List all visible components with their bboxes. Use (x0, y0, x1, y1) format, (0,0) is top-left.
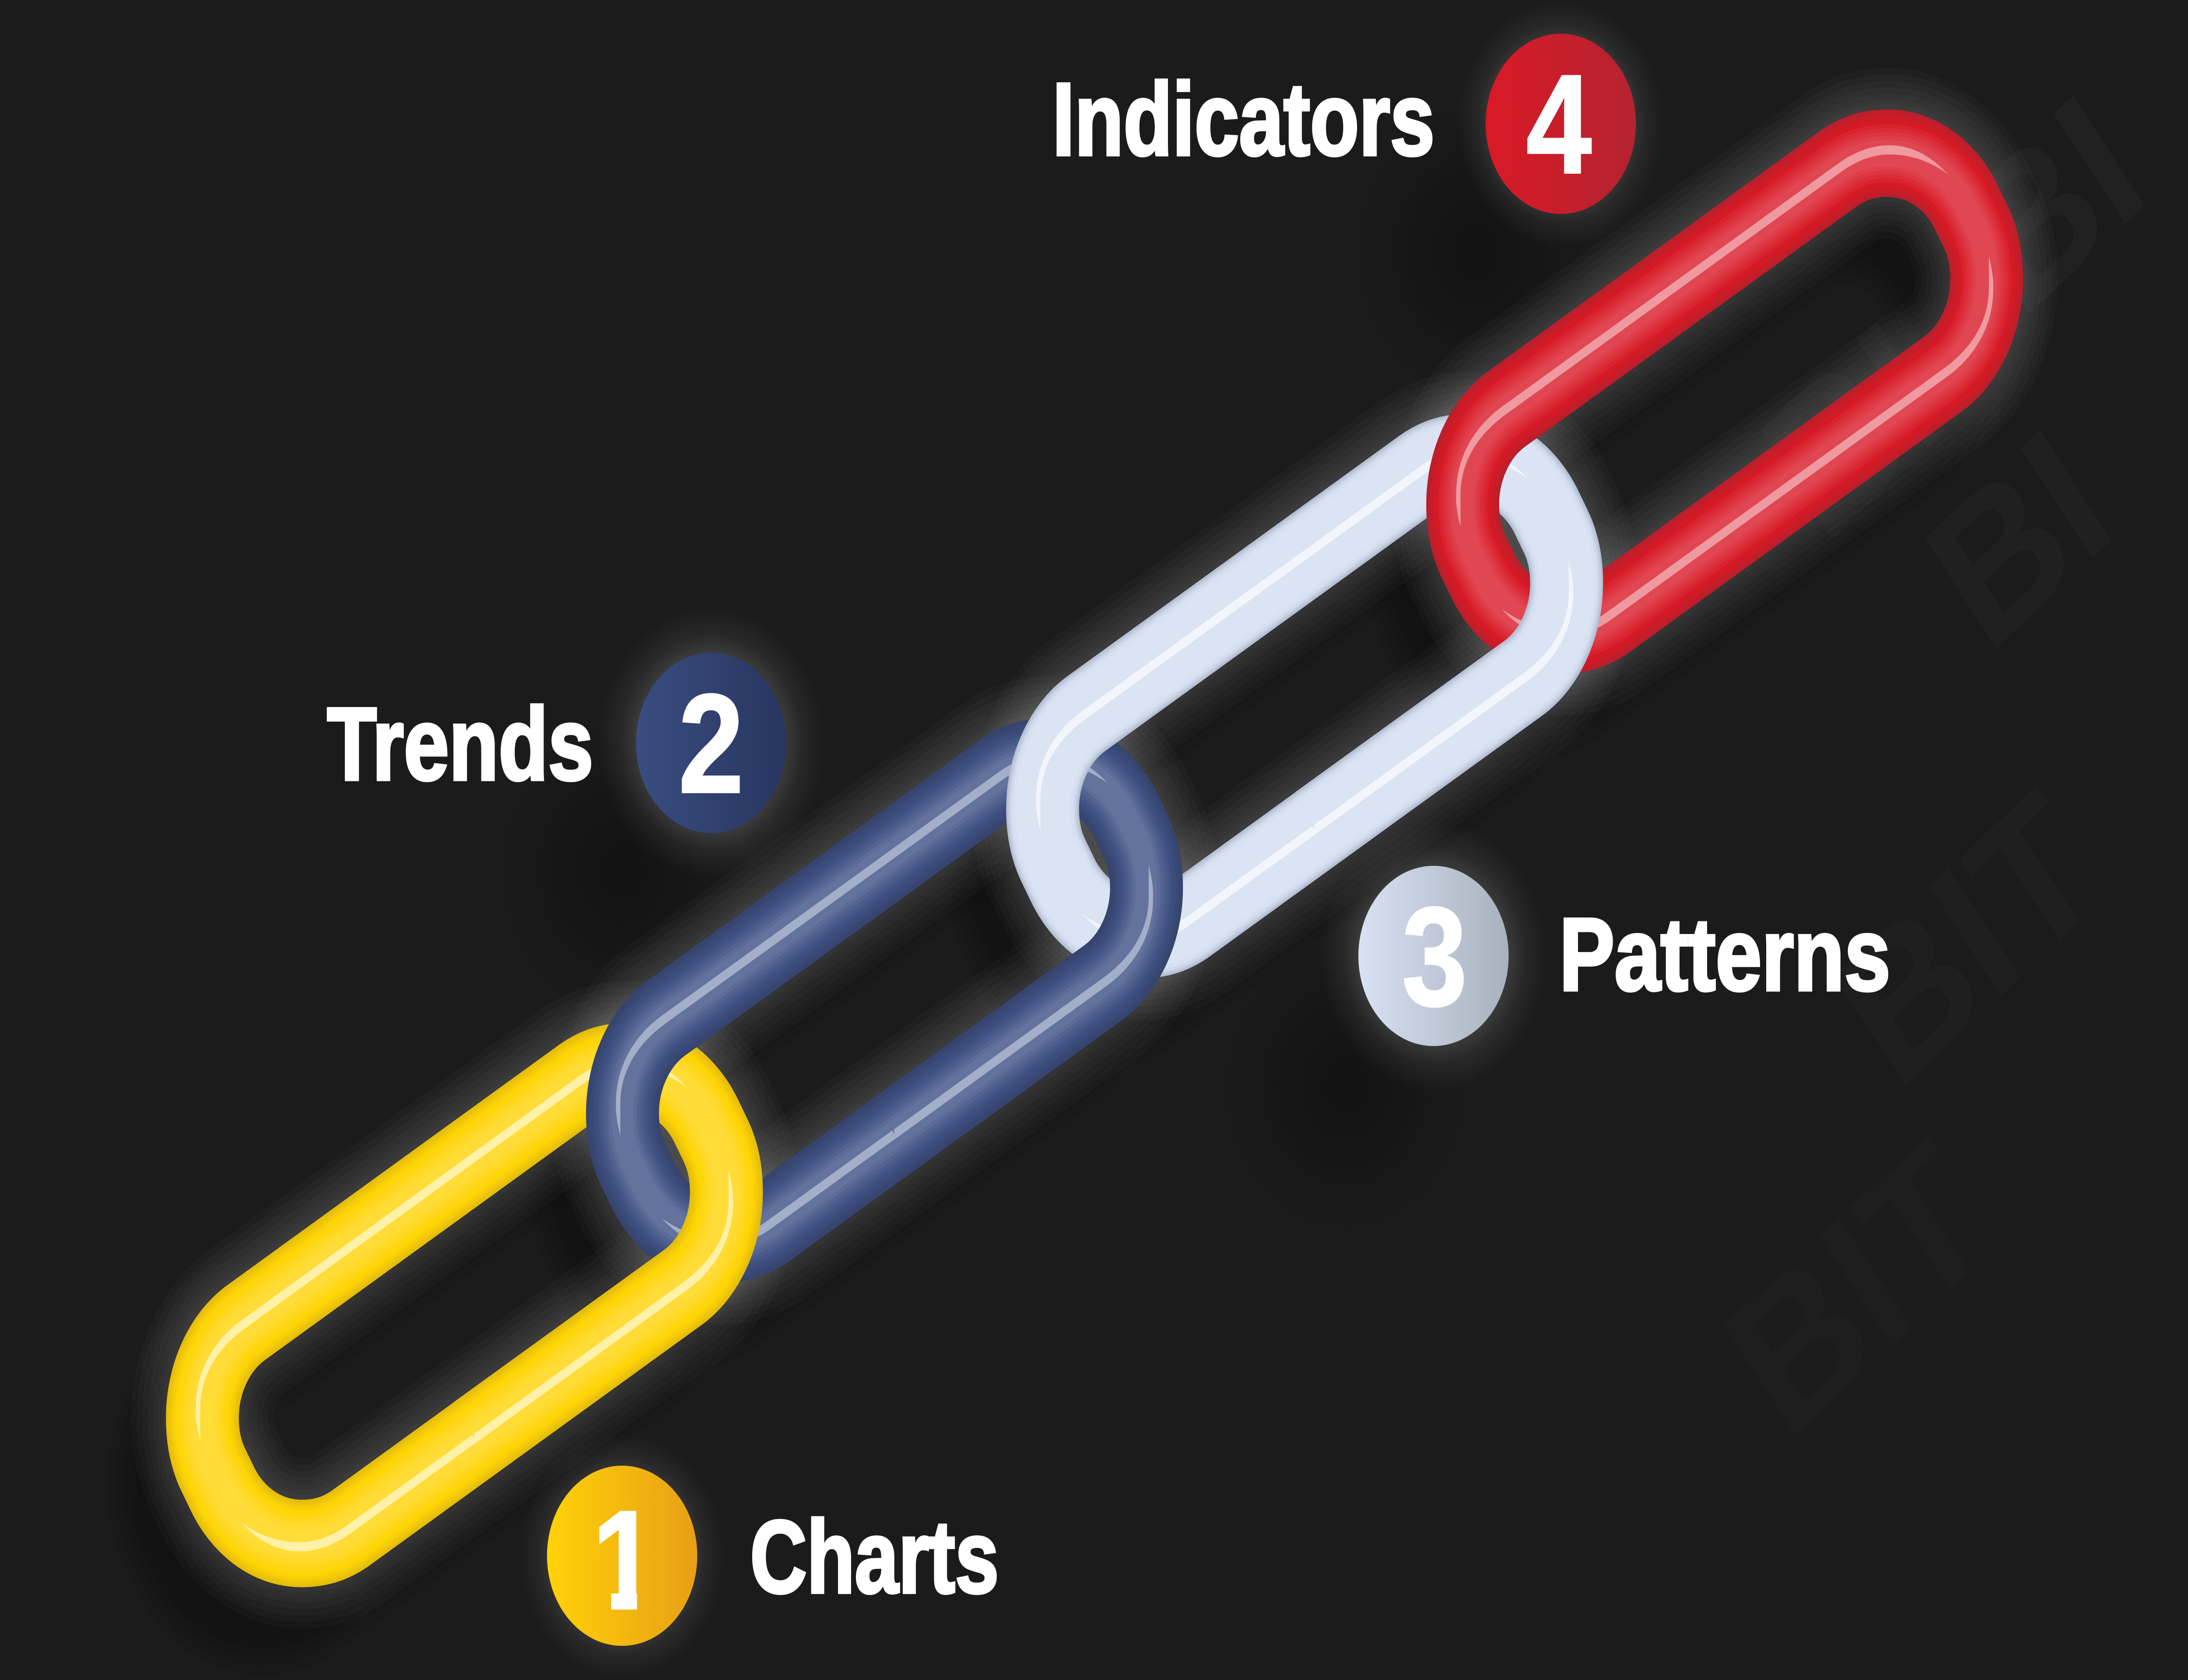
background watermark lettering (1693, 53, 2176, 1478)
badge 4: 4 (1526, 46, 1592, 203)
background watermark lettering: BI (1730, 279, 1978, 581)
link 4: red (1456, 145, 1993, 638)
badge 1 (547, 1466, 697, 1646)
step 3: badge and label Patterns (1358, 866, 1890, 1046)
background watermark lettering: BI (1927, 53, 2176, 356)
label Charts: Charts (750, 1499, 999, 1615)
label Trends: Trends (327, 686, 593, 802)
step 4: label Indicators and badge (1052, 34, 1636, 214)
label Patterns: Patterns (1559, 897, 1890, 1012)
badge 3 (1358, 866, 1509, 1046)
badge 1: 1 (592, 1481, 657, 1638)
chain of four interlocking links (196, 145, 1993, 1551)
link 2: blue (616, 754, 1153, 1247)
drop shadows (162, 103, 1946, 1609)
label Indicators: Indicators (1052, 62, 1434, 177)
link 2 front section over link 3 (894, 814, 1153, 1140)
badge 3: 3 (1402, 878, 1467, 1035)
link 1: yellow (196, 1059, 733, 1551)
step 2: label Trends and badge (327, 653, 786, 833)
badge 4 (1486, 34, 1636, 214)
link 1 front section over link 2 (474, 1118, 733, 1444)
badge 2: 2 (678, 665, 744, 822)
background watermark lettering: BI (1894, 388, 2142, 690)
link 3 front section over link 4 (1314, 509, 1573, 835)
background watermark lettering: BIT (1802, 749, 2132, 1128)
step 1: badge and label Charts (547, 1466, 999, 1646)
badge 2 (636, 653, 786, 833)
link 3: white (1036, 450, 1573, 942)
background watermark lettering: BIT (1693, 1099, 2023, 1478)
